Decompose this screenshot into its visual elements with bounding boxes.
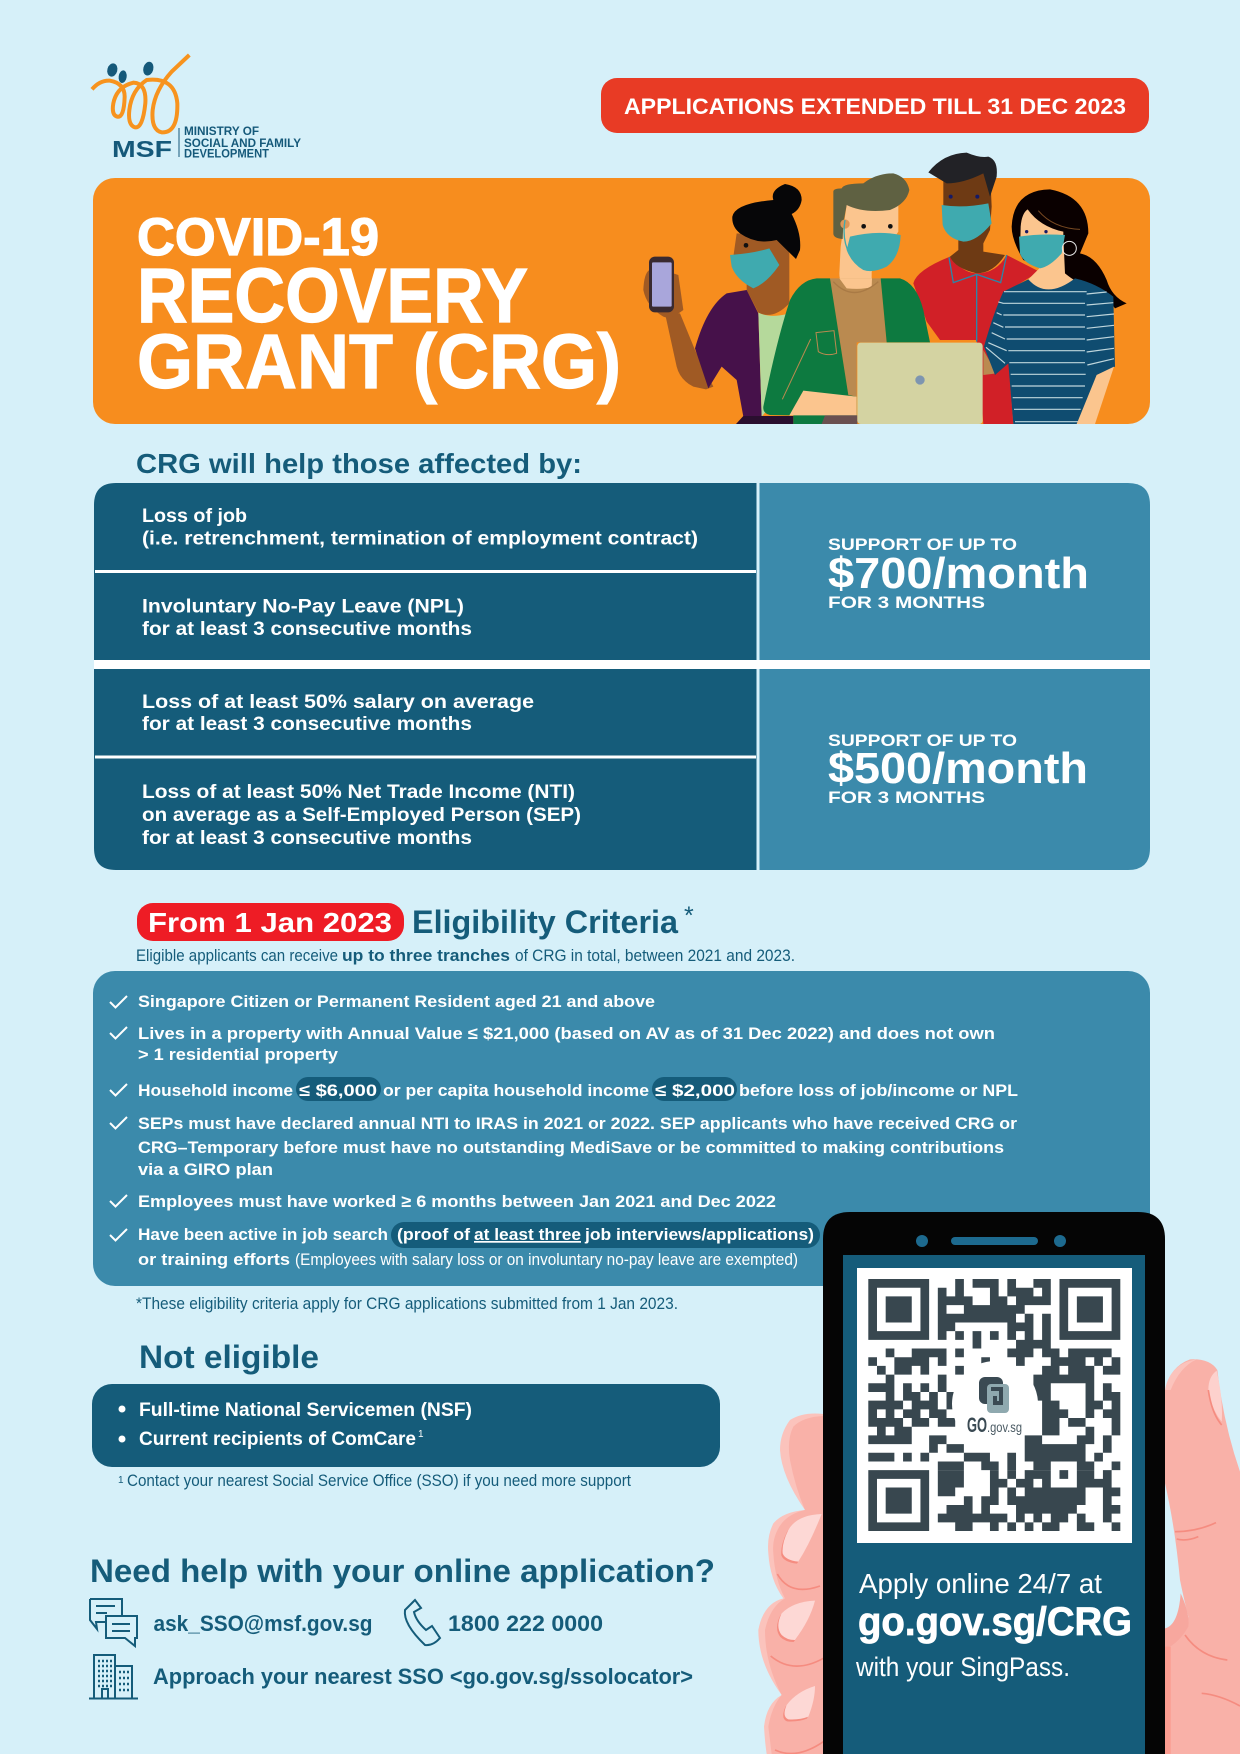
- title: COVID-19: [137, 208, 379, 267]
- heading: eligibility criteria: [137, 902, 694, 941]
- QR code: [857, 1268, 1132, 1543]
- panel: eligibility list: [93, 971, 1150, 1286]
- row: salary loss: Loss of at least 50% salary on average: [142, 692, 534, 713]
- title: [137, 208, 621, 405]
- item: job search: job interviews/applications): [584, 1225, 814, 1244]
- text: tranches note: up to three tranches: [342, 946, 510, 965]
- logo: MSF: SOCIAL AND FAMILY: [184, 138, 301, 150]
- text: apply online: [855, 1568, 1132, 1682]
- item: SEP: SEPs must have declared annual NTI to IRAS in 2021 or 2022. SEP applicants who have received CRG or: [138, 1114, 1017, 1133]
- row: loss of job: (i.e. retrenchment, termination of employment contract): [142, 528, 698, 550]
- row: NTI loss: [142, 782, 581, 849]
- icon: building: [89, 1655, 138, 1698]
- item: employees: Employees must have worked ≥ 6 months between Jan 2021 and Dec 2022: [138, 1192, 776, 1211]
- item: job search: (Employees with salary loss or on involuntary no-pay leave are exempted): [295, 1250, 798, 1269]
- person: woman in striped shirt: [983, 189, 1127, 424]
- illustration: four people in masks: [643, 153, 1127, 424]
- item: household income: Household income: [138, 1081, 293, 1100]
- panel: not eligible list: [92, 1384, 720, 1467]
- panel: hero: [93, 178, 1150, 424]
- callout: $700 per month: SUPPORT OF UP TO: [828, 535, 1017, 554]
- laptop: [857, 343, 983, 424]
- row: NTI loss: Loss of at least 50% Net Trade Income (NTI): [142, 782, 575, 803]
- checkmarks: [110, 996, 127, 1240]
- logo: MSF: DEVELOPMENT: [184, 148, 269, 160]
- person: man in red shirt: [913, 153, 1039, 424]
- item: job search: at least three: [474, 1225, 581, 1244]
- item: household income: or per capita household income: [383, 1081, 649, 1100]
- text: tranches note: Eligible applicants can receive: [136, 946, 338, 965]
- icon: chat bubbles: [90, 1599, 137, 1646]
- row: NTI loss: on average as a Self-Employed Person (SEP): [142, 805, 581, 826]
- callout: $500 per month: FOR 3 MONTHS: [828, 788, 985, 807]
- footnote: SSO: 1: [118, 1475, 124, 1486]
- heading: CRG will help: CRG will help those affected by:: [136, 448, 582, 479]
- row: loss of job: Loss of job: [142, 506, 247, 527]
- item: citizen: Singapore Citizen or Permanent Resident aged 21 and above: [138, 992, 655, 1011]
- banner: applications extended: APPLICATIONS EXTENDED TILL 31 DEC 2023: [624, 94, 1126, 119]
- illustration: left fingers: [758, 1413, 823, 1754]
- heading: need help: Need help with your online application?: [90, 1553, 715, 1589]
- icon: GO logo: .gov.sg: [987, 1419, 1022, 1435]
- heading: eligibility criteria: Eligibility Criteria: [412, 904, 678, 940]
- icon: telephone: [405, 1600, 440, 1645]
- callout: $700 per month: FOR 3 MONTHS: [828, 593, 985, 612]
- item: household income: ≤ $2,000: [655, 1081, 735, 1100]
- item: job search: or training efforts: [138, 1250, 290, 1269]
- heading: eligibility criteria: *: [684, 902, 694, 930]
- row: NPL: Involuntary No-Pay Leave (NPL): [142, 596, 464, 618]
- person: man in green jacket: [763, 173, 930, 424]
- item: job search: Have been active in job search: [138, 1225, 388, 1244]
- panel: not eligible list: Full-time National Servicemen (NSF): [139, 1400, 472, 1421]
- item: household income: before loss of job/income or NPL: [739, 1081, 1018, 1100]
- text: tranches note: of CRG in total, between 2021 and 2023.: [515, 946, 795, 965]
- row: salary loss: [142, 692, 534, 735]
- title: GRANT (CRG): [137, 319, 621, 405]
- icon: GO logo: GO: [967, 1414, 987, 1437]
- heading: not eligible: Not eligible: [139, 1339, 319, 1375]
- phone: [823, 1212, 1165, 1754]
- logo: MSF: MINISTRY OF: [184, 126, 259, 138]
- text: email: ask_SSO@msf.gov.sg: [154, 1611, 372, 1636]
- row: NTI loss: for at least 3 consecutive months: [142, 828, 472, 849]
- item: SEP: [138, 1114, 1017, 1179]
- item: annual value: > 1 residential property: [138, 1045, 339, 1064]
- banner: applications extended: [601, 78, 1149, 133]
- item: job search: (proof of: [397, 1225, 470, 1244]
- text: approach SSO: Approach your nearest SSO <go.gov.sg/ssolocator>: [153, 1664, 693, 1689]
- item: annual value: Lives in a property with Annual Value ≤ $21,000 (based on AV as of 31 Dec 2022) and does not own: [138, 1024, 995, 1043]
- item: job search: [138, 1222, 820, 1269]
- row: loss of job: [142, 506, 698, 550]
- logo: MSF: MSF: [112, 136, 172, 162]
- item: SEP: via a GIRO plan: [138, 1160, 273, 1179]
- person: woman with phone: [643, 184, 802, 424]
- logo: MSF: [92, 55, 301, 162]
- row: NPL: [142, 596, 472, 640]
- phone speaker and cameras: [916, 1235, 1066, 1247]
- item: SEP: CRG–Temporary before must have no outstanding MediSave or be committed to making contributions: [138, 1138, 1004, 1157]
- item: household income: ≤ $6,000: [299, 1081, 377, 1100]
- illustration: right thumb and palm: [1165, 1359, 1240, 1754]
- icon: GO logo: [967, 1377, 1022, 1437]
- callout: $500 per month: SUPPORT OF UP TO: [828, 731, 1017, 750]
- callout: $700 per month: [828, 535, 1089, 612]
- text: apply online: go.gov.sg/CRG: [858, 1600, 1132, 1644]
- callout: $500 per month: $500/month: [828, 744, 1088, 793]
- title: RECOVERY: [137, 253, 528, 339]
- heading: eligibility criteria: From 1 Jan 2023: [148, 907, 392, 938]
- text: phone number: 1800 222 0000: [448, 1611, 603, 1636]
- text: apply online: with your SingPass.: [855, 1652, 1070, 1682]
- callout: $700 per month: $700/month: [828, 549, 1089, 598]
- footnote: eligibility: *These eligibility criteria apply for CRG applications submitted from 1 Jan 2023.: [136, 1294, 678, 1313]
- text: apply online: Apply online 24/7 at: [859, 1568, 1102, 1599]
- panel: support table: [94, 483, 1150, 870]
- callout: $500 per month: [828, 731, 1088, 807]
- text: tranches note: [136, 946, 795, 965]
- footnote: SSO: Contact your nearest Social Service Office (SSO) if you need more support: [127, 1471, 631, 1490]
- panel: not eligible list: 1: [418, 1429, 424, 1440]
- panel: not eligible list: Current recipients of ComCare: [139, 1429, 416, 1450]
- row: NPL: for at least 3 consecutive months: [142, 619, 472, 640]
- row: salary loss: for at least 3 consecutive months: [142, 714, 472, 735]
- item: annual value: [138, 1024, 995, 1064]
- item: household income: [138, 1077, 1018, 1101]
